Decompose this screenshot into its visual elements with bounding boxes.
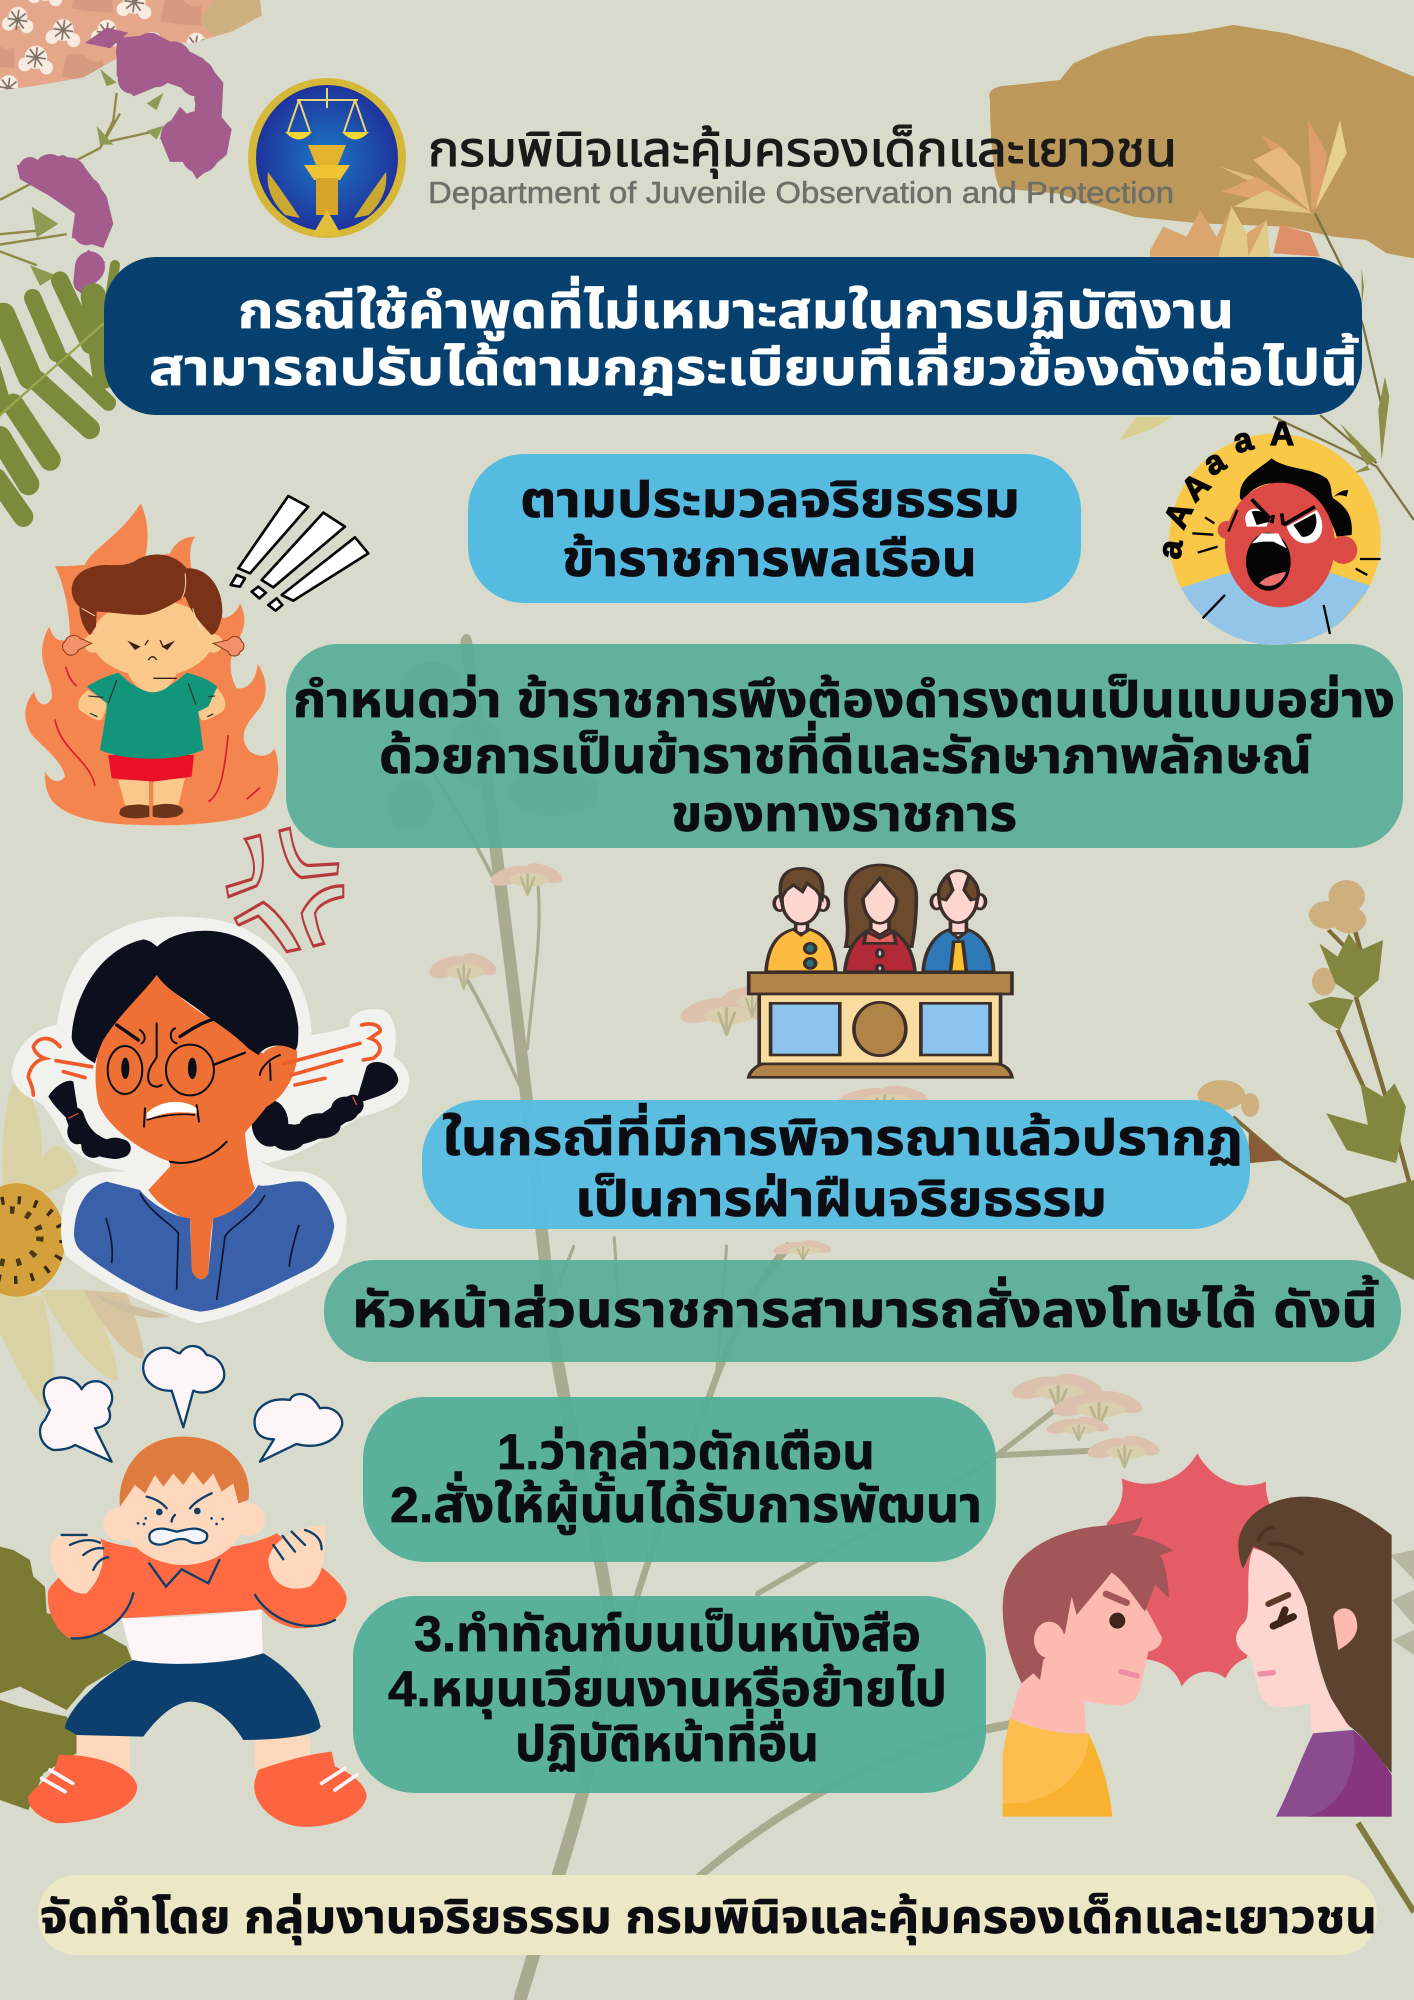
header organisation name: Department of Juvenile Observation and Protection bbox=[428, 175, 1174, 210]
panel: head of agency: หัวหน้าส่วนราชการสามารถสั่งลงโทษได้ ดังนี้ bbox=[352, 1275, 1379, 1338]
decoration: right plant bbox=[1198, 880, 1414, 1240]
decoration: lower right leaves bbox=[1345, 1180, 1414, 1912]
decoration: fern bbox=[0, 265, 115, 517]
panel: head of agency bbox=[324, 1260, 1401, 1362]
panel: ethics violation bbox=[422, 1100, 1250, 1229]
decoration: purple flowers bbox=[0, 28, 232, 294]
decoration: dried orange leaves and stems bbox=[1120, 120, 1414, 520]
header organisation name bbox=[428, 124, 1177, 210]
panel: code of ethics heading: ตามประมวลจริยธรรม bbox=[520, 472, 1020, 528]
panel: penalties 1 and 2 bbox=[363, 1397, 996, 1562]
decoration: sunflower bbox=[0, 1080, 170, 1410]
panel: ethics violation: เป็นการฝ่าฝืนจริยธรรม bbox=[575, 1171, 1107, 1227]
panel: penalties 1 and 2: 1.ว่ากล่าวตักเตือน bbox=[497, 1424, 875, 1480]
icon: furious boy bbox=[28, 1346, 367, 1827]
icon: shouting man: a bbox=[1229, 420, 1257, 461]
icon: angry girl with glasses bbox=[12, 917, 409, 1323]
panel: civil servant conduct: กำหนดว่า ข้าราชการพึงต้องดำรงตนเป็นแบบอย่าง bbox=[293, 672, 1395, 728]
title banner: สามารถปรับได้ตามกฎระเบียบที่เกี่ยวข้องดังต่อไปนี้ bbox=[149, 333, 1359, 396]
decoration: torn tan paper bbox=[989, 25, 1414, 258]
icon: judges panel bbox=[749, 865, 1012, 1077]
icon: shouting man: A bbox=[1174, 466, 1218, 509]
title banner: กรณีใช้คำพูดที่ไม่เหมาะสมในการปฏิบัติงาน bbox=[238, 276, 1234, 341]
footer credit bbox=[38, 1875, 1377, 1955]
icon: arguing couple bbox=[1003, 1453, 1392, 1817]
panel: penalties 3 and 4: 4.หมุนเวียนงานหรือย้ายไป bbox=[388, 1661, 947, 1719]
icon: shouting man bbox=[1162, 421, 1381, 645]
icon: shouting man: A bbox=[1157, 497, 1201, 534]
panel: civil servant conduct bbox=[286, 644, 1403, 848]
footer credit: จัดทำโดย กลุ่มงานจริยธรรม กรมพินิจและคุ้มครองเด็กและเยาวชน bbox=[40, 1891, 1377, 1945]
panel: ethics violation: ในกรณีที่มีการพิจารณาแล้วปรากฏ bbox=[442, 1103, 1243, 1166]
panel: penalties 3 and 4: ปฏิบัติหน้าที่อื่น bbox=[515, 1709, 819, 1772]
panel: code of ethics heading bbox=[468, 454, 1081, 603]
icon: anger mark bbox=[227, 828, 343, 952]
icon: flaming angry kid bbox=[25, 503, 278, 825]
decoration: bottom-left leaves bbox=[0, 1547, 132, 1810]
panel: penalties 3 and 4: 3.ทำทัณฑ์บนเป็นหนังสือ bbox=[414, 1606, 921, 1662]
panel: code of ethics heading: ข้าราชการพลเรือน bbox=[562, 531, 977, 587]
panel: penalties 3 and 4 bbox=[353, 1596, 986, 1793]
icon: shouting man: a bbox=[1151, 537, 1191, 561]
panel: civil servant conduct: ด้วยการเป็นข้าราชที่ดีและรักษาภาพลักษณ์ bbox=[379, 721, 1312, 784]
header organisation name: กรมพินิจและคุ้มครองเด็กและเยาวชน bbox=[428, 124, 1177, 179]
icon: shouting man: A bbox=[1270, 416, 1294, 453]
panel: penalties 1 and 2: 2.สั่งให้ผู้นั้นได้รับการพัฒนา bbox=[390, 1472, 982, 1535]
icon: shouting man: a bbox=[1197, 442, 1232, 484]
panel: civil servant conduct: ของทางราชการ bbox=[671, 786, 1017, 842]
title banner bbox=[104, 257, 1362, 415]
header logo bbox=[248, 78, 406, 238]
icon: exclamation marks bbox=[231, 496, 368, 611]
decoration: faded centre plant bbox=[387, 644, 1163, 2000]
decoration: top-left floral paper bbox=[0, 0, 262, 90]
